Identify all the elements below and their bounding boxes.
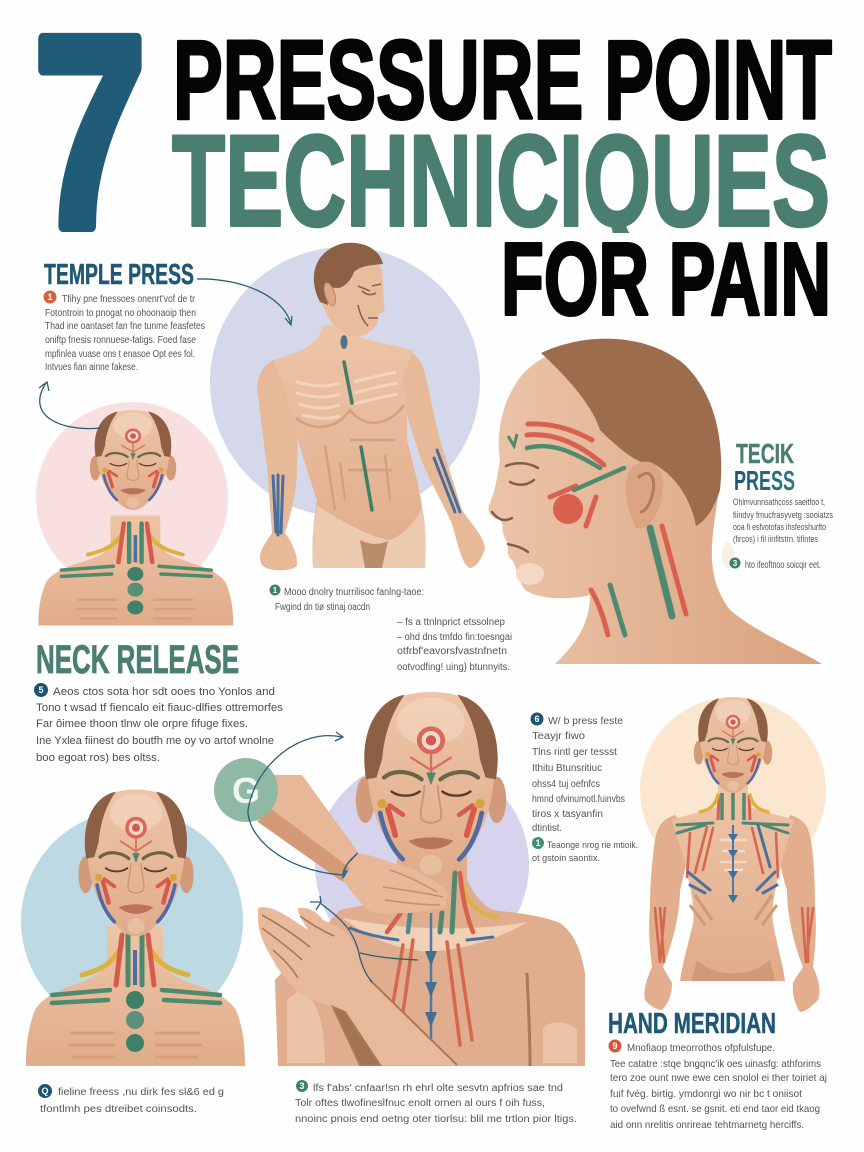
badge: step: 1	[273, 586, 278, 595]
center right body	[532, 716, 625, 834]
temple press body text: Fotontroin to pnogat no ohoonaoip then	[45, 308, 196, 319]
crotch shadow	[360, 540, 388, 568]
panel: tecik press text	[722, 438, 833, 571]
badge: step five: 5	[38, 685, 44, 695]
center right body: tiros x tasyanfin	[532, 809, 603, 820]
tecik press body: (fircos) i fil iinfitstrn. tifintes	[733, 534, 818, 544]
torso	[273, 320, 426, 568]
note lines: otfrbf'eavorsfvastnfnetn	[397, 646, 507, 657]
panel: temple press text	[44, 259, 205, 373]
ear and face details	[324, 283, 335, 306]
bottom left body: fieline freess ,nu dirk fes sl&6 ed g	[58, 1087, 224, 1098]
panel: hand meridian text	[608, 1008, 827, 1131]
note lines: ot gstoin saontix.	[532, 853, 600, 863]
tecik press body	[733, 497, 833, 544]
center right body: Teayjr fiwo	[532, 731, 585, 742]
badge and note: hto ifeoftnoo soicqir eet.	[745, 560, 821, 571]
torso	[672, 780, 794, 981]
chest meridians	[430, 913, 432, 1040]
panel: neck release text	[34, 638, 284, 764]
panel: bottom center text	[295, 1080, 577, 1125]
neck release body	[36, 686, 284, 764]
figure: standing torso with circle	[210, 243, 485, 570]
temple press body text: Tfihy pne fnessoes onenrt'vof de tr	[62, 294, 196, 305]
panel: bottom left text	[38, 1084, 224, 1115]
badge: step one green	[532, 837, 544, 849]
torso marks	[677, 823, 788, 833]
badge: Q: Q	[41, 1086, 49, 1096]
panel: center right text	[530, 712, 638, 863]
neck release body: Tono t wsad tf fiencalo eit fiauc-dlfies ottremorfes	[36, 702, 284, 714]
head	[320, 250, 385, 336]
arrow: temple press to torso	[197, 279, 292, 325]
arm shadow strips	[333, 980, 457, 1065]
note lines: ootvodfing! uing} btunnyits.	[397, 662, 510, 673]
chest shading	[527, 973, 530, 1066]
abdominal shading	[690, 895, 777, 925]
note lines: Mooo dnolry tnurrilisoc fanlng-taoe:	[284, 587, 424, 598]
forearm	[240, 775, 358, 882]
figure: bust with blue circle	[21, 790, 245, 1066]
bottom left body	[40, 1087, 224, 1115]
note lines: Fwgind dn tiø stinaj oacdn	[275, 602, 370, 613]
hair	[314, 243, 383, 305]
face	[694, 697, 772, 793]
shoulders and meridians	[38, 516, 233, 625]
badge: step three	[296, 1080, 308, 1092]
lower hand finger lines	[262, 915, 334, 978]
lavender circle	[210, 247, 480, 517]
lower body	[312, 505, 426, 568]
temple press body text: Thad ine oantaset fan fne tunme feasfetes	[45, 321, 205, 332]
shoulders and meridians	[26, 925, 245, 1066]
hand meridian body: Mnofiaop tmeorrothos ofpfulsfupe.	[627, 1042, 775, 1054]
rib lines	[296, 372, 398, 418]
badge and note	[722, 542, 821, 571]
face	[78, 790, 194, 936]
note lines	[275, 587, 512, 673]
neck release body: Far ôimee thoon tlnw ole orpre fifuge fixes.	[36, 718, 248, 730]
neck meridians	[462, 883, 497, 917]
note lines	[532, 840, 638, 863]
neck marks	[650, 528, 672, 616]
heading: temple press: TEMPLE PRESS	[44, 259, 194, 291]
bottom center body: nnoinc pnois end oetng oter tiorlsu: blil me trtlon pior ltigs.	[295, 1114, 577, 1125]
temple press body text: Intvues fian ainne fakese.	[45, 362, 138, 373]
arrow: curved from badge to forehead	[248, 732, 343, 875]
left arm	[257, 360, 297, 570]
figure: large head profile	[488, 339, 822, 664]
figure: central head with neck hand	[214, 692, 585, 1066]
tecik press body: Ohlmvunnsathcoss saeitfoo t,	[733, 497, 825, 507]
chest light band	[343, 918, 527, 952]
center right body: Ithitu Btunsritiuc	[532, 763, 602, 774]
temple press body text	[45, 294, 205, 373]
hand meridian body	[610, 1042, 827, 1131]
badge: step five	[34, 683, 48, 697]
neck release body: Aeos ctos sota hor sdt ooes tno Yonlos and	[53, 686, 275, 698]
lilac circle	[315, 758, 529, 972]
neck release body: Ine Yxlea fiinest do boutfh me oy vo artof wnolne	[36, 735, 274, 747]
arrow: shoulder callouts	[310, 896, 372, 982]
badge: step	[270, 584, 280, 596]
ear	[626, 461, 663, 528]
panel: tecik press text: PRESS	[734, 465, 795, 496]
center right body: W/ b press feste	[548, 716, 623, 727]
bottom center body	[295, 1083, 577, 1125]
tecik press body: fiindvy fmucfrasyvetg :sooiatzs	[733, 510, 833, 520]
badge: step nine: 9	[612, 1041, 618, 1051]
center right body: ohss4 tuj oefnfcs	[532, 779, 600, 790]
hand meridian body: tero zoe ount nwe ewe cen snolol ei ther toiriet aj	[610, 1072, 827, 1084]
hand meridian body: to ovefwnd ß esnt. se gsnit. eti end taor eid tkaog	[610, 1103, 820, 1115]
hand on neck	[343, 853, 448, 913]
neck release body: boo egoat ros) bes oltss.	[36, 752, 160, 764]
blue circle	[21, 810, 243, 1032]
title	[38, 32, 832, 317]
tecik press body: ooa fi esfvotofas ihsfeoshurfto	[733, 522, 826, 532]
cheek marks	[553, 494, 583, 524]
bottom center body: lfs f'abs' cnfaar!sn rh ehrl olte sesvtn apfrios sae tnd	[313, 1083, 563, 1094]
heading: neck release: NECK RELEASE	[36, 638, 239, 682]
badge: step one green: 1	[535, 838, 541, 848]
face	[90, 410, 176, 510]
badge: step one	[44, 290, 56, 304]
badge: step one: 1	[47, 292, 53, 302]
center right body: dtintist.	[532, 823, 562, 834]
face	[356, 692, 506, 878]
green badge: G	[232, 770, 260, 811]
hand meridian body: Tee catatre :stqe bngqnc'ik oes uinasfg: athforims	[610, 1058, 821, 1070]
bottom center body: Tolr oftes tlwofineslfnuc enolt ornen al ours f oih fuss,	[295, 1098, 545, 1109]
bottom left body: tfontlmh pes dtreibet coinsodts.	[40, 1104, 197, 1115]
underwear shade	[692, 960, 775, 981]
torso	[275, 850, 585, 1066]
badge: step six: 6	[534, 714, 540, 724]
heading: hand meridian: HAND MERIDIAN	[608, 1008, 776, 1040]
arrow: to pink figure	[39, 382, 100, 429]
temple press body text: oniftp fnesis ronnuese-fatigs. Foed fase	[45, 335, 196, 346]
figure: bust with pink circle	[36, 402, 233, 625]
forearm shade	[258, 808, 350, 882]
badge: step three: 3	[299, 1081, 305, 1091]
green badge	[214, 758, 278, 822]
center right body: Tlns rintl ger tessst	[532, 747, 617, 758]
center right body: hmnd ofvinumotl.fuinvbs	[532, 794, 625, 805]
figure: right torso with peach circle	[640, 697, 826, 1012]
meridian marks	[340, 335, 348, 349]
wristband	[343, 853, 358, 878]
eye, nose, mouth	[492, 463, 538, 552]
pink circle	[36, 402, 228, 594]
hair	[541, 339, 721, 526]
sternum light lines	[720, 840, 747, 870]
heading: tecik press: TECIK	[736, 438, 794, 469]
note lines: – ohd dns tmfdo fin:toesngai	[397, 632, 512, 643]
badge: Q	[38, 1084, 52, 1098]
panel: middle note text	[270, 584, 512, 673]
peach circle	[640, 697, 826, 883]
badge: step nine	[608, 1040, 622, 1052]
skin profile	[488, 342, 822, 664]
hand meridian body: fuif fvég. birtig. ymdonrgi wo nir bc t oniisot	[610, 1088, 802, 1100]
note lines: Teaonge nrog rie mtioik.	[547, 840, 638, 850]
badge and note: 3	[733, 559, 738, 568]
left arm	[644, 815, 688, 1010]
right arm	[778, 815, 819, 1012]
note lines: – fs a ttnlnprict etssolnep	[397, 617, 505, 628]
right arm	[400, 347, 485, 568]
badge: step six	[530, 712, 544, 726]
lower hand and arm	[258, 907, 457, 1065]
temple press body text: mpfinlea vuase ons t enasoe Opt ees fol.	[45, 349, 195, 360]
hand meridian body: aid onn nrelitis onrireae tehtmarnetg herciffs.	[610, 1119, 804, 1131]
hand fingers	[383, 870, 443, 905]
